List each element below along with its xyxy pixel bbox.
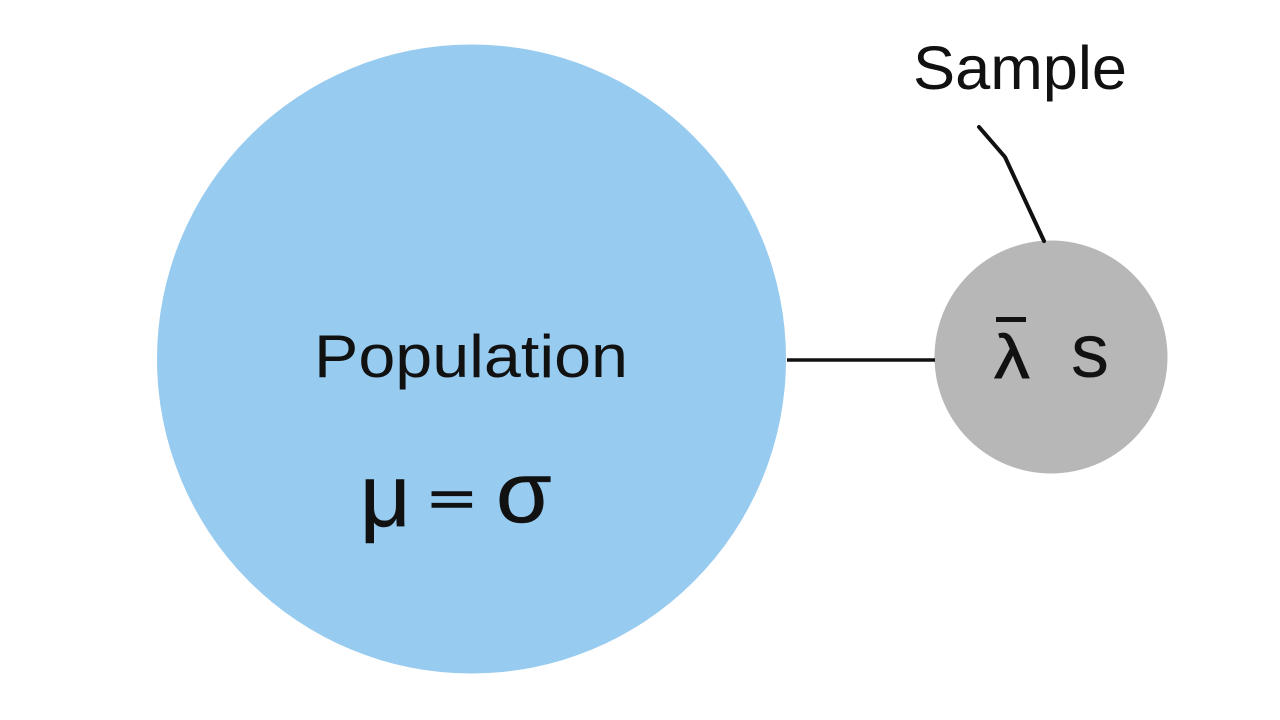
sample leader line bbox=[979, 127, 1044, 241]
sample statistics bbox=[994, 309, 1109, 394]
population circle bbox=[157, 44, 786, 674]
equals sign: = bbox=[429, 473, 475, 525]
sample label: Sample bbox=[913, 34, 1127, 102]
connector line between population and sample bbox=[787, 358, 935, 362]
sample mean symbol: λ bbox=[994, 323, 1030, 392]
sigma symbol: σ bbox=[496, 444, 552, 541]
mu symbol: μ bbox=[360, 446, 411, 545]
population formula bbox=[360, 444, 552, 545]
mean bar bbox=[996, 317, 1026, 322]
sample circle bbox=[934, 240, 1168, 474]
population label: Population bbox=[314, 323, 628, 390]
sample deviation symbol: s bbox=[1071, 309, 1109, 394]
